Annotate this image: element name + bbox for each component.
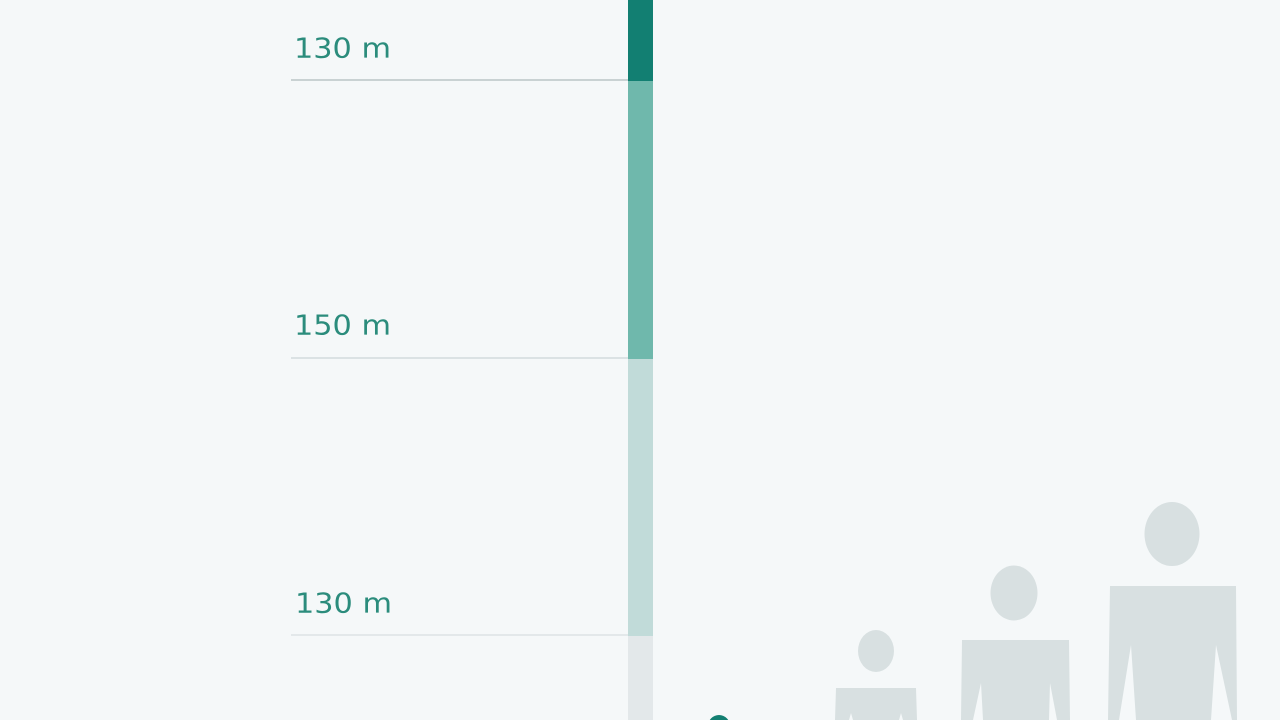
depth label: 130 m xyxy=(294,32,391,64)
head xyxy=(858,630,894,672)
head xyxy=(1144,502,1200,566)
marker line xyxy=(291,634,628,636)
teal dot xyxy=(708,715,730,720)
depth label: 150 m xyxy=(294,308,391,342)
body xyxy=(961,640,1070,720)
marker line xyxy=(291,79,628,81)
bar segment: palest xyxy=(628,636,653,720)
marker line xyxy=(291,357,628,359)
depth label: 130 m xyxy=(295,586,392,620)
body xyxy=(1108,586,1237,720)
body xyxy=(835,688,917,720)
depth bar xyxy=(628,0,653,720)
bar segment: darkest xyxy=(628,0,653,81)
head xyxy=(990,566,1038,620)
figure: large xyxy=(1108,502,1237,720)
bar segment: light xyxy=(628,359,653,636)
figure: medium xyxy=(961,566,1070,720)
bar segment: medium xyxy=(628,81,653,359)
figure: small xyxy=(835,630,917,720)
